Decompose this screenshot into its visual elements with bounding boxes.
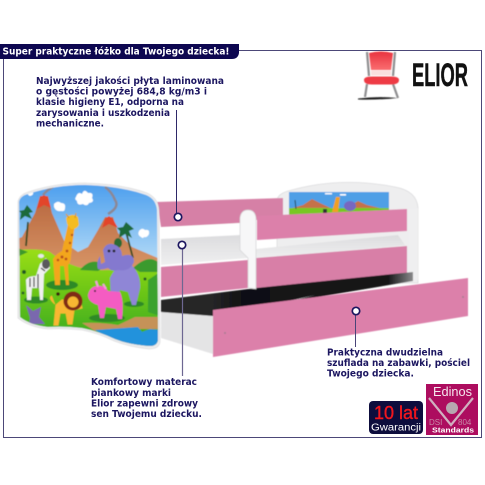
text block: board quality: o gęstości powyżej 684,8 kg/m3 i (36, 86, 207, 98)
page frame (4, 50, 482, 438)
text block: drawer: Praktyczna dwudzielna (327, 348, 443, 358)
dark under-bed space (161, 272, 413, 316)
text block: drawer: szuflada na zabawki, pościel (327, 357, 470, 369)
header banner: Super praktyczne łóżko dla Twojego dziecka! (2, 46, 230, 58)
right mattress (256, 235, 405, 258)
badge: 10 year warranty (369, 401, 423, 434)
clouds (75, 191, 93, 205)
drawer front (213, 278, 468, 357)
text block: board quality: zarysowania i uszkodzenia (36, 108, 170, 119)
badge: 10 year warranty: Gwarancji (371, 422, 421, 434)
badge: Edinos standards: 804 (458, 418, 472, 427)
giraffe (53, 213, 79, 285)
left pink side (161, 260, 248, 297)
smoke (43, 187, 116, 214)
text block: mattress: Elior zapewni zdrowy (91, 398, 199, 410)
lion (51, 292, 82, 325)
badge: Edinos standards: Standards (432, 426, 474, 434)
text block: mattress: piankowy marki (91, 388, 171, 399)
left lower end and drawer side (161, 312, 213, 354)
badge: 10 year warranty: 10 lat (374, 403, 418, 423)
leader: drawer (352, 307, 360, 347)
elephant (97, 244, 140, 305)
text block: mattress (91, 377, 202, 420)
safari picture (15, 183, 161, 349)
bed illustration (157, 182, 468, 357)
text block: board quality: Najwyższej jakości płyta laminowana (36, 75, 224, 87)
headboard mini picture (289, 192, 389, 216)
volcanoes (18, 195, 158, 272)
text block: drawer (327, 348, 470, 380)
text block: mattress: sen Twojemu dziecku. (91, 409, 202, 420)
right pink side (256, 246, 407, 288)
badge: Edinos standards: DSI (429, 418, 442, 427)
headboard (277, 182, 418, 283)
logo: Elior chair and wordmark (358, 52, 468, 100)
shadows (46, 280, 78, 290)
left mattress (161, 235, 248, 265)
icon: red chair (358, 52, 399, 100)
text block: board quality (36, 75, 224, 130)
badge: Edinos standards (426, 384, 478, 435)
meadow (15, 249, 160, 349)
leader: board quality (174, 110, 182, 221)
front rail (257, 209, 407, 240)
text block: drawer: Twojego dziecka. (327, 368, 414, 380)
back rail, left part (157, 198, 283, 227)
text block: mattress: Komfortowy materac (91, 377, 197, 388)
hippo (88, 281, 123, 319)
white band (161, 223, 241, 239)
flower (26, 305, 45, 328)
side panel with safari picture (15, 183, 161, 349)
panel edge (18, 183, 160, 349)
zebra (26, 254, 50, 300)
post (240, 210, 256, 289)
badge: Edinos standards: Edinos (433, 385, 472, 399)
text block: board quality: klasie higieny E1, odporna na (36, 97, 184, 108)
leader: mattress (178, 241, 186, 376)
palms (26, 222, 133, 258)
river bank and water (82, 317, 160, 331)
text block: board quality: mechaniczne. (36, 118, 104, 130)
